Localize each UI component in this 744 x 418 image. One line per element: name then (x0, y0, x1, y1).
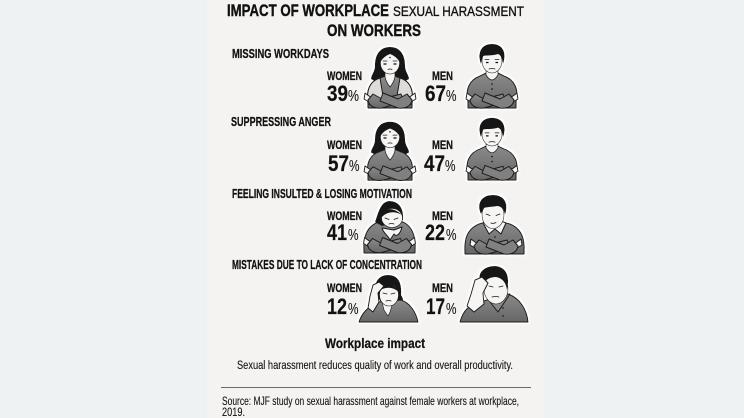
source note: Source: MJF study on sexual harassment against female workers at workplace, (222, 394, 519, 408)
women stat: WOMEN (327, 140, 362, 152)
women stat: 39 (327, 81, 348, 106)
women stat: 41 (327, 220, 347, 245)
icon: man hand on forehead (460, 266, 528, 322)
men stat (424, 140, 456, 176)
men stat: 47 (424, 151, 445, 176)
panel: infographic (207, 0, 544, 418)
men stat (425, 211, 457, 245)
women stat (327, 283, 362, 319)
title: IMPACT OF WORKPLACE (227, 1, 389, 20)
heading: MISSING WORKDAYS (232, 47, 329, 61)
text: summary sentence: Sexual harassment reduces quality of work and overall productivity. (237, 358, 513, 372)
subheading: workplace impact: Workplace impact (325, 335, 425, 351)
men stat: % (446, 88, 457, 105)
women stat: WOMEN (327, 71, 362, 83)
men stat: % (446, 301, 457, 318)
women stat: WOMEN (327, 211, 362, 223)
section: mistakes due to lack of concentration (232, 258, 528, 322)
women stat: WOMEN (327, 283, 362, 295)
section: missing workdays (232, 44, 518, 108)
women stat: 12 (327, 294, 347, 319)
men stat: 22 (425, 220, 445, 245)
men stat (426, 283, 457, 319)
heading: SUPPRESSING ANGER (231, 115, 331, 129)
women stat: % (349, 158, 360, 175)
icon: woman arms crossed (364, 122, 416, 181)
women stat (327, 71, 362, 106)
men stat: MEN (432, 71, 453, 83)
men stat: MEN (432, 211, 453, 223)
women stat (327, 211, 362, 245)
women stat (327, 140, 362, 176)
women stat: 57 (328, 151, 349, 176)
men stat: MEN (432, 283, 453, 295)
icon: man arms crossed (466, 44, 518, 108)
section: suppressing anger (231, 115, 518, 181)
section: feeling insulted and losing motivation (232, 187, 524, 254)
title: SEXUAL HARASSMENT (393, 3, 524, 19)
men stat: 17 (426, 294, 445, 319)
title (227, 1, 524, 40)
title: ON WORKERS (327, 21, 421, 40)
men stat: % (445, 158, 456, 175)
men stat (425, 71, 457, 106)
icon: woman head down (364, 201, 416, 253)
heading: MISTAKES DUE TO LACK OF CONCENTRATION (232, 258, 422, 272)
men stat: 67 (425, 81, 446, 106)
icon: woman arms crossed (364, 47, 416, 108)
women stat: % (348, 301, 359, 318)
men stat: % (446, 227, 457, 244)
women stat: % (348, 227, 359, 244)
icon: woman hand on forehead (359, 275, 418, 322)
men stat: MEN (432, 140, 453, 152)
women stat: % (348, 88, 359, 105)
icon: man head down (465, 195, 524, 254)
icon: man arms crossed (466, 118, 518, 180)
heading: FEELING INSULTED & LOSING MOTIVATION (232, 187, 412, 201)
source note (222, 394, 519, 418)
